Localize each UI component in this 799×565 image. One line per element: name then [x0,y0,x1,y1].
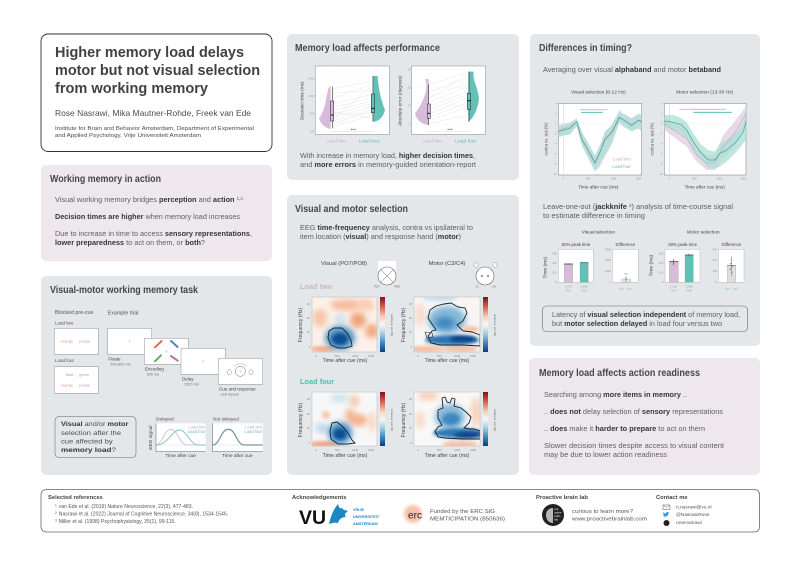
text block: readiness: may be due to lower action readiness [544,450,667,459]
chart: motor selection time course: -6 [660,151,663,155]
axes: 500 [437,354,442,358]
chart: jackknife motor selection: 400 [659,261,664,265]
chart: jackknife visual selection: Difference [616,242,636,247]
logo: VU: VU [299,507,326,529]
logo: VU: UNIVERSITEIT [353,515,380,519]
chart: jackknife motor selection: 200 [713,258,718,262]
chart: decision time raincloud: 600 [310,112,315,116]
chart: jackknife motor selection: 200 [659,270,664,274]
chart: motor selection time course: 0 [661,121,663,125]
chart: jackknife motor selection: four [686,289,692,293]
chart: jackknife motor selection: Time (ms) [649,255,655,276]
trial: encoding: 500 ms [147,373,159,377]
chart: motor selection time course: -10 [659,172,663,176]
text block: performance summary [300,151,476,169]
chart: jackknife motor selection: 0 [662,280,664,284]
trial: delay [181,348,225,387]
chart: decision time raincloud: 200 [310,129,315,133]
chart: jackknife visual selection: 0 [555,280,557,284]
logo: VU: VRIJE [353,508,364,512]
panel: differences in timing [530,34,760,346]
icon: motor head map [474,262,497,288]
chart: delayed: Load two [188,425,206,430]
axes: Frequency (Hz) [298,307,304,342]
axes: Time after cue (ms) [425,358,470,364]
axes: 1500 [368,448,375,452]
icon: motor head map: C4 [492,284,496,288]
chart: decision time raincloud: 1400 [308,76,315,80]
chart: jackknife motor selection: Motor selection [687,230,720,236]
chart: motor selection time course: contra vs. ipsi (%) [650,122,655,156]
text block: intro: 1,2 [237,196,243,201]
axes: 10 [307,330,310,334]
stimulus: load two: purple [79,339,91,344]
chart: motor selection time course: 2 [661,111,663,115]
task diagram: Load two [55,320,74,325]
chart: jackknife motor selection: four - two [725,287,738,291]
chart: visual selection time course [544,90,642,189]
chart: delayed: Time after cue [165,453,196,459]
chart: absolute error raincloud: *** [447,128,453,133]
axes: 500 [437,448,442,452]
axes: 20 [307,412,310,416]
text block: readiness: .. does not delay selection of sensory representations [544,407,723,416]
stimulus: load four: blue [66,372,74,377]
axes: Frequency (Hz) [401,307,407,342]
references: 2 [55,511,57,515]
chart: jackknife motor selection: 100 [713,269,718,273]
task diagram: Load four [55,358,74,363]
axes: Time after cue (ms) [323,358,368,364]
icon: visual head map: PO8 [394,284,400,288]
text block: performance summary: With increase in memory load, higher decision times, [300,151,475,160]
icon: motor head map: C3 [475,284,479,288]
logo: ERC: erc [408,510,422,522]
text block: readiness: Searching among more items in memory .. [544,390,687,399]
chart: jackknife visual selection: Load [565,284,572,288]
chart: jackknife motor selection: 0 [716,280,718,284]
chart: jackknife motor selection [649,230,744,293]
axes: 20 [409,412,412,416]
callout: question: Visual and/or motor [61,421,129,428]
heatmap: visual load two: contra vs. ipsi (%) [390,314,394,336]
chart: visual selection time course: -4 [554,141,557,145]
chart: jackknife visual selection: 200 [552,270,557,274]
chart: decision time raincloud: Decision time (ms) [300,81,305,120]
trial: cue and response: Cue and response [219,387,256,392]
heatmap: visual load two [298,297,394,364]
heatmap: motor load two: contra vs. ipsi (%) [493,314,497,336]
axes: Frequency (Hz) [298,402,304,437]
chart: visual selection time course: Load two [613,157,631,162]
text block: jackknife: 3 [629,203,632,208]
icon: twitter [663,512,670,517]
chart: decision time raincloud: 1000 [308,94,315,98]
trial: fixate: Fixate [108,356,121,361]
icon: github [664,520,670,526]
chart: jackknife motor selection: two [671,289,676,293]
references [48,495,228,525]
stimulus: load two: orange [61,339,74,344]
axes: 1000 [454,448,461,452]
callout: latency conclusion: but motor selection delayed in load four versus two [552,319,722,328]
text block: performance summary: and more errors in memory-guided orientation-report [300,160,476,169]
trial: cue and response [218,358,263,397]
references: Miller et al. (1998) Psychophysiology, 35(1), 99-115. [59,519,176,525]
chart: not delayed: Load four [244,429,263,434]
stimulus: load four [54,367,98,393]
text block: jackknife: to estimate difference in timing [543,211,645,220]
chart: motor selection time course: -2 [660,131,663,135]
chart: delayed [148,417,206,459]
chart: visual selection time course: -2 [554,131,557,135]
references: 3 [55,518,57,522]
proactive brain lab: pro [554,507,559,511]
chart: jackknife visual selection [543,230,638,293]
proactive brain lab: brain [554,514,561,518]
task diagram [54,310,263,459]
chart: jackknife motor selection: 600 [659,251,664,255]
contact: @NasrawiRose [676,512,710,518]
text block: readiness: Slower decision times despite access to visual content [544,441,724,450]
axes: 10 [307,426,310,430]
chart: jackknife motor selection: 50% peak time [668,242,698,247]
icon: visual head map: PO7 [374,284,380,288]
chart: motor selection time course: -4 [660,141,663,145]
chart: visual selection time course: Time after cue (ms) [578,184,619,189]
panel: memory load affects action readiness [529,358,760,475]
heatmap: visual load four [298,392,394,459]
axes: 0 [315,354,317,358]
chart: decision time raincloud: Load two [326,139,346,145]
text block: readiness: .. does make it harder to prepare to act on them [544,424,705,433]
chart: visual selection time course: 0 [555,121,557,125]
chart: jackknife visual selection: four - two [619,287,632,291]
chart: not delayed: Not delayed [213,417,239,423]
axes: 4 [410,441,412,445]
chart: jackknife visual selection: four [581,289,587,293]
text block: intro [55,195,252,247]
logo: VU [299,504,380,529]
chart: delayed: Load four [188,429,206,434]
references: van Ede et al. (2019) Nature Neuroscience, 22(3), 477-483. [59,504,193,510]
funding note [430,509,505,522]
chart: absolute error raincloud: 10 [408,103,411,107]
text block: intro: Due to increase in time to access sensory representations, [55,229,252,238]
chart: visual selection time course: 4 [555,101,557,105]
chart: motor selection time course [650,90,747,189]
axes: 4 [410,345,412,349]
chart: jackknife motor selection: Load [685,284,693,288]
logo: VU: AMSTERDAM [353,522,378,526]
trial: fixate: 500-800 ms [110,363,131,367]
chart: jackknife visual selection: Time (ms) [543,257,549,278]
chart: jackknife visual selection: 2000 [605,258,612,262]
proactive brain lab: lab [554,518,559,522]
trial: fixate: + [128,339,131,344]
chart: motor selection time course: Motor selection (13-30 Hz) [676,90,733,96]
chart: motor selection time course: 0 [669,177,671,181]
label: load two: Load two [300,282,333,291]
chart: delayed: Delayed [156,417,174,423]
chart: visual selection time course: 1000 [610,177,617,181]
funding note: MEMTICIPATION (850636) [430,516,505,522]
trial: encoding: + [165,349,168,354]
chart: absolute error raincloud: 5 [409,121,411,125]
title: Higher memory load delays [55,45,244,61]
trial: cue and response: + [239,369,242,374]
chart: decision time raincloud: *** [351,128,356,133]
text block: readiness [544,390,724,459]
trial: encoding [144,338,188,377]
references: 1 [55,504,57,508]
axes: 1500 [470,448,477,452]
chart: motor selection time course: -8 [660,161,663,165]
text block: EEG description: item location (visual) and response hand (motor) [300,232,461,241]
contact [656,495,712,526]
axes [401,397,477,459]
proactive brain lab: Proactive brain lab [536,495,588,501]
axes: Frequency (Hz) [401,402,407,437]
callout: latency conclusion: Latency of visual selection independent of memory load, [552,310,740,319]
heatmap: visual load four: contra vs. ipsi (%) [390,409,394,431]
axes: 500 [335,448,340,452]
axes: Time after cue (ms) [425,453,470,459]
callout: question: cue affected by [61,438,114,445]
trial: fixate [108,328,152,367]
chart: jackknife visual selection: 400 [552,261,557,265]
heading: working memory in action: Working memory in action [50,174,161,185]
heading: action readiness: Memory load affects action readiness [539,368,700,379]
text block: jackknife [543,202,733,220]
chart: visual selection time course: 0 [563,177,565,181]
chart: delayed: EEG signal [148,426,154,450]
panel: memory load affects performance [287,34,519,180]
contact: n.nasrawi@vu.nl [676,504,712,510]
chart: motor selection time course: Time after cue (ms) [685,184,725,189]
trial: delay: 1500 ms [184,383,199,387]
chart: visual selection time course: -6 [554,151,557,155]
chart: not delayed: Load two [245,425,263,430]
chart: motor selection time course: 1000 [716,177,723,181]
axes: 0 [315,448,317,452]
text block: jackknife: ) analysis of time-course signal [631,202,733,211]
chart: visual selection time course: 1500 [635,177,642,181]
heatmap: motor load two [401,295,497,364]
chart: jackknife visual selection: Load [580,284,588,288]
title: from working memory [55,81,208,97]
callout: question [55,417,136,458]
chart: not delayed: Time after cue [222,453,253,459]
axes: 10 [409,426,412,430]
chart: visual selection time course: 500 [586,177,591,181]
chart: absolute error raincloud: 20 [408,67,411,71]
icon: visual head map [374,261,400,288]
chart: jackknife visual selection: 1000 [605,269,612,273]
heading: task: Visual-motor working memory task [50,285,198,296]
authors: Rose Nasrawi, Mika Mautner-Rohde, Freek van Ede [55,108,251,118]
funding note: Funded by the ERC StG [430,509,495,515]
heatmap: motor load four: contra vs. ipsi (%) [493,409,497,431]
task diagram: Blocked pre-cue [55,310,94,316]
axes: 20 [307,316,310,320]
chart: jackknife visual selection: 600 [552,251,557,255]
heading: performance: Memory load affects performance [295,43,440,54]
stimulus: load four: orange [61,382,74,387]
text block: intro: Visual working memory bridges perception and action [55,195,234,204]
axes: 1000 [454,354,461,358]
chart: jackknife visual selection: two [566,289,571,293]
axes: 30 [409,397,412,401]
chart: jackknife visual selection: 3000 [605,247,612,251]
axes: 0 [417,448,419,452]
axes: 30 [307,397,310,401]
axes [298,302,375,364]
axes: 0 [417,354,419,358]
chart: visual selection time course: -8 [554,161,557,165]
axes: 1500 [470,354,477,358]
chart: absolute error raincloud: Load four [455,139,477,145]
chart: jackknife visual selection: 50% peak time [562,242,591,247]
stimulus: load four: purple [79,382,91,387]
title: motor but not visual selection [55,63,260,79]
label: load four: Load four [300,377,334,386]
axes: 4 [308,441,310,445]
label: visual electrodes: Visual (PO7/PO8) [321,261,367,267]
trial: delay: Delay [182,376,194,381]
heatmap: motor load four [401,392,497,459]
chart: visual selection time course: contra vs. ipsi (%) [544,122,549,156]
proactive brain lab: www.proactivebrainlab.com [571,516,647,522]
axes: 30 [409,302,412,306]
chart: jackknife motor selection: Load [670,284,677,288]
chart: absolute error raincloud [398,66,485,145]
text block: EEG description: EEG time-frequency analysis, contra vs ipsilateral to [300,223,473,232]
chart: absolute error raincloud: Absolute error (degrees) [398,75,403,126]
trial: cue and response: self-repeat [221,393,240,397]
trial: delay: + [202,359,205,364]
axes: 30 [307,302,310,306]
axes: 1500 [368,354,375,358]
title [55,45,260,97]
logo: ERC [404,505,422,523]
title block [41,34,272,152]
axes: 1000 [352,354,359,358]
chart: visual selection time course: -10 [553,172,557,176]
axes: 500 [335,354,340,358]
chart: jackknife motor selection: Difference [722,242,742,247]
heading: timing: Differences in timing? [539,43,632,54]
chart: absolute error raincloud: 15 [408,85,411,89]
chart: motor selection time course: 500 [692,177,697,181]
panel: working memory in action [41,165,272,261]
icon: mail [663,505,670,510]
affiliation: Institute for Brain and Behavior Amsterdam, Department of Experimental [55,126,254,132]
proactive brain lab [536,495,647,526]
footer [41,490,760,532]
chart: decision time raincloud: Load four [359,139,380,145]
chart: motor selection time course: 4 [661,101,663,105]
text block: jackknife: Leave-one-out (jackknife [543,202,626,211]
task diagram: Example trial [108,311,138,317]
label: motor electrodes: Motor (C3/C4) [429,261,465,267]
callout: question: selection after the [61,430,121,437]
references: Selected references [48,495,103,501]
contact: rosenasrawi [676,520,702,526]
chart: not delayed [213,417,263,459]
axes [298,397,375,459]
chart: visual selection time course: 2 [555,111,557,115]
axes: 4 [308,345,310,349]
axes: Time after cue (ms) [323,453,368,459]
text block: averaging: Averaging over visual alphaband and motor betaband [543,65,721,74]
callout: latency conclusion [542,306,748,332]
axes: 10 [409,330,412,334]
stimulus: load two [54,328,98,354]
chart: jackknife visual selection: ns [624,271,628,275]
chart: motor selection time course: 1500 [740,177,747,181]
panel: visual-motor task [41,276,272,475]
chart: jackknife visual selection: 0 [610,280,612,284]
chart: visual selection time course: Visual selection (8-12 Hz) [571,90,626,96]
chart: visual selection time course: Load four [612,164,631,169]
contact: Contact me [656,495,688,501]
references: Nasrawi et al. (2022) Journal of Cognitive Neuroscience, 34(8), 1534-1546. [59,512,228,518]
stimulus: load four: green [79,372,89,377]
acknowledgements: Acknowledgements [292,495,346,501]
text block: EEG description [300,223,473,241]
text block: intro: lower preparedness to act on them, or both? [55,238,205,247]
proactive brain lab: active [554,510,562,514]
callout: question: memory load ? [61,447,116,454]
axes: 20 [409,316,412,320]
affiliation [55,126,254,139]
chart: absolute error raincloud: Load two [422,139,442,145]
chart: jackknife visual selection: Visual selection [582,230,615,236]
axes [401,302,477,364]
panel: visual and motor selection [287,195,519,475]
heading: visual and motor: Visual and motor selection [295,204,408,215]
chart: decision time raincloud [300,66,389,145]
axes: 1000 [352,448,359,452]
chart: jackknife motor selection: 300 [713,247,718,251]
text block: intro: Decision times are higher when memory load increases [55,212,240,221]
trial: encoding: Encoding [145,367,164,372]
affiliation: and Applied Psychology, Vrije Universiteit Amsterdam [55,133,202,139]
proactive brain lab: curious to learn more? [572,509,633,515]
